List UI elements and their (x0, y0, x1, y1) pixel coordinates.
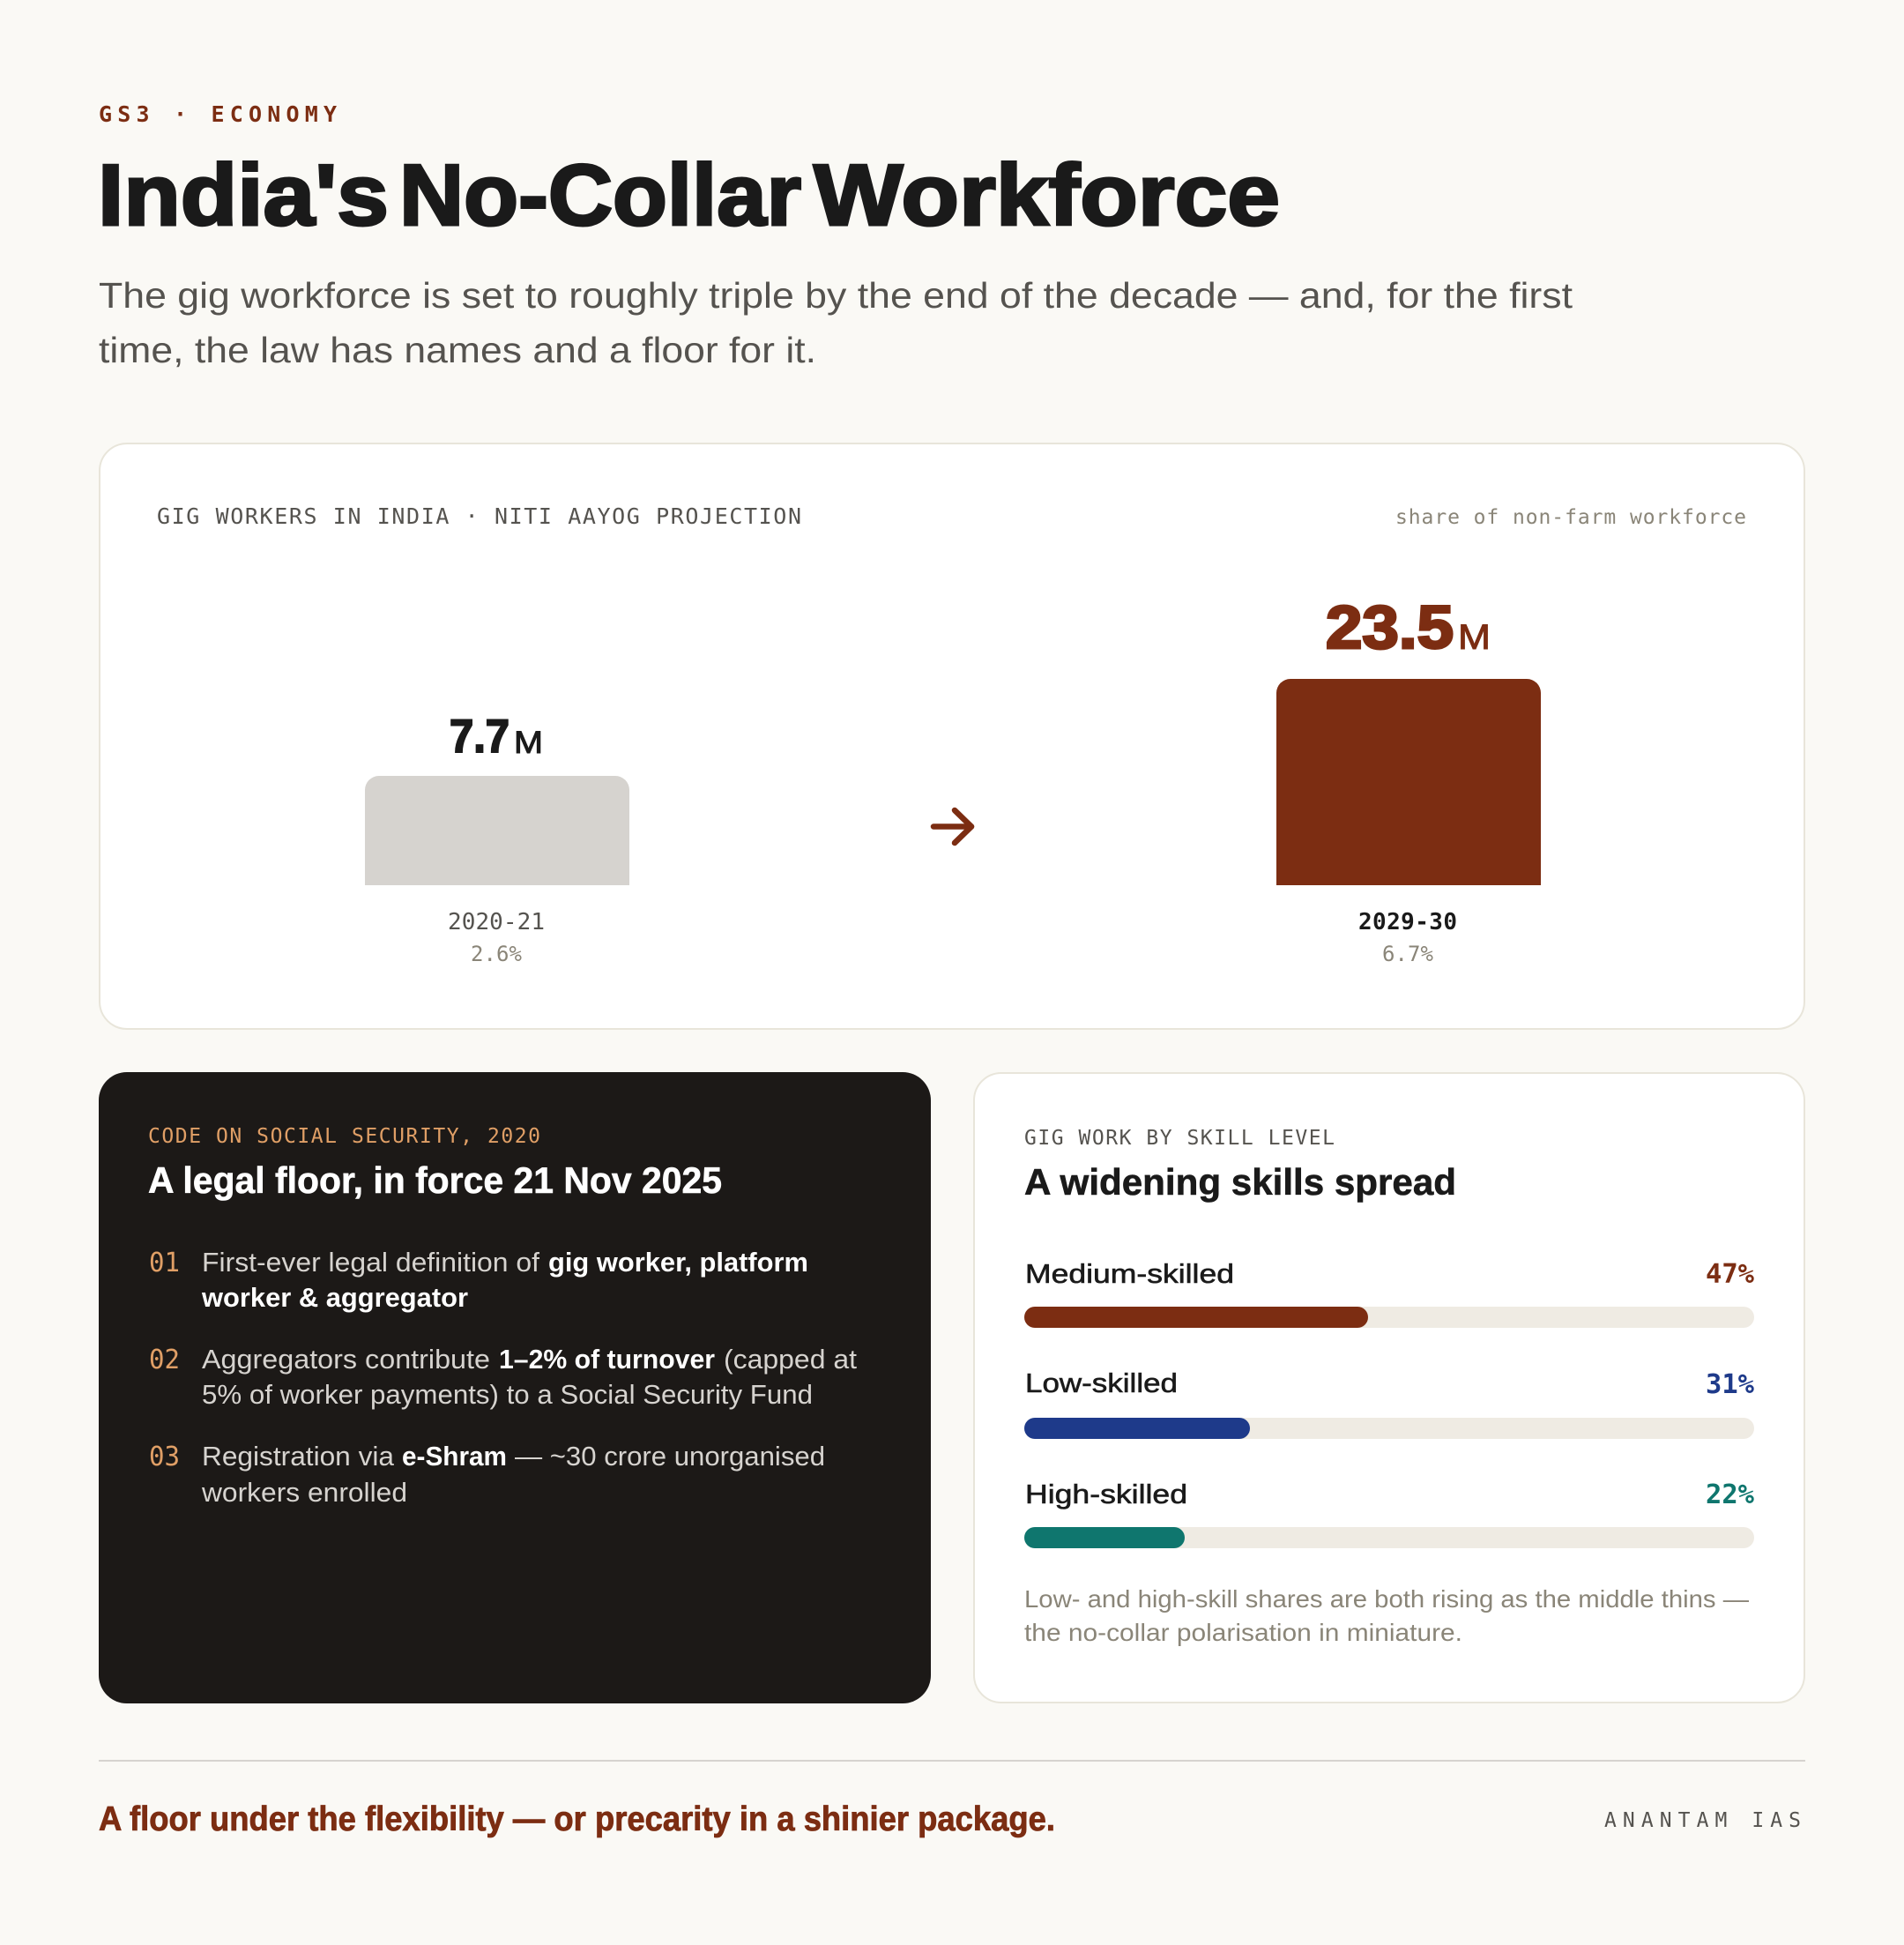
header (98, 101, 1573, 370)
note (1024, 1585, 1749, 1646)
item 03: e-Shram (402, 1441, 507, 1472)
panel eyebrow: CODE ON SOCIAL SECURITY, 2020 (148, 1125, 540, 1148)
chart heading: GIG WORKERS IN INDIA · NITI AAYOG PROJECTION (157, 503, 801, 529)
note: Low- and high-skill shares are both rising as the middle thins — (1024, 1585, 1749, 1613)
item 02 (149, 1344, 857, 1410)
item 01: gig worker, platform (548, 1247, 808, 1278)
note: the no-collar polarisation in miniature. (1024, 1619, 1462, 1646)
year label: 2020-21 (448, 909, 545, 935)
brand: ANANTAM IAS (1604, 1809, 1801, 1832)
chart note: share of non-farm workforce (1395, 506, 1746, 529)
title (98, 146, 1280, 243)
title: India's (98, 146, 389, 243)
panel eyebrow: GIG WORK BY SKILL LEVEL (1024, 1127, 1335, 1150)
item 03: 03 (149, 1442, 180, 1472)
bar: 2029-30 (1276, 679, 1541, 885)
value: 7.7 M: 7.7 (450, 711, 509, 763)
bar: 2020-21 (365, 776, 629, 885)
row: low-skilled (1024, 1367, 1754, 1439)
arrow (933, 810, 971, 843)
panel heading: A widening skills spread (1024, 1161, 1456, 1203)
share label: 6.7% (1382, 942, 1434, 966)
item 01: 01 (149, 1248, 180, 1278)
row: low-skilled: 31% (1706, 1369, 1754, 1400)
value: 7.7 M: M (514, 726, 543, 760)
year label: 2029-30 (1358, 909, 1457, 935)
tagline: A floor under the flexibility — or precarity in a shinier package. (99, 1800, 1055, 1838)
row: medium-skilled (1024, 1258, 1754, 1328)
item 02: Aggregators contribute (202, 1344, 490, 1375)
value: 23.5 M: M (1458, 618, 1491, 657)
item 03: Registration via (202, 1441, 395, 1472)
share label: 2.6% (471, 942, 523, 966)
row: high-skilled (1024, 1479, 1754, 1548)
item 01: worker & aggregator (201, 1282, 468, 1313)
value: 23.5 M: 23.5 (1326, 593, 1454, 661)
panel: skill level (974, 1073, 1804, 1703)
item 02: 1–2% of turnover (499, 1344, 715, 1375)
subtitle: time, the law has names and a floor for it. (99, 330, 816, 370)
value: 7.7 M (450, 711, 543, 763)
row: high-skilled: High-skilled (1025, 1479, 1187, 1509)
item 02: 5% of worker payments) to a Social Security Fund (202, 1379, 813, 1410)
item 03 (149, 1441, 825, 1508)
item 02: (capped at (724, 1344, 857, 1375)
panel: gig workers projection (100, 443, 1804, 1029)
title: No-Collar (399, 146, 801, 243)
subtitle (99, 275, 1573, 370)
item 03: — ~30 crore unorganised (515, 1441, 825, 1472)
eyebrow: GS3 · ECONOMY (99, 101, 337, 127)
item 03: workers enrolled (201, 1477, 407, 1508)
item 01 (149, 1247, 808, 1313)
panel: legal floor (99, 1072, 931, 1703)
footer (99, 1800, 1801, 1838)
row: high-skilled: 22% (1706, 1479, 1754, 1510)
bar group: 2020-21 (365, 711, 629, 966)
bar group: 2029-30 (1276, 593, 1541, 966)
row: medium-skilled: Medium-skilled (1025, 1258, 1234, 1289)
item 02: 02 (149, 1345, 180, 1375)
row: medium-skilled: 47% (1706, 1259, 1754, 1290)
item 01: First-ever legal definition of (202, 1247, 539, 1278)
row: low-skilled: Low-skilled (1025, 1367, 1178, 1398)
panel heading: A legal floor, in force 21 Nov 2025 (148, 1159, 722, 1201)
title: Workforce (814, 146, 1280, 243)
subtitle: The gig workforce is set to roughly triple by the end of the decade — and, for the first (99, 275, 1573, 316)
